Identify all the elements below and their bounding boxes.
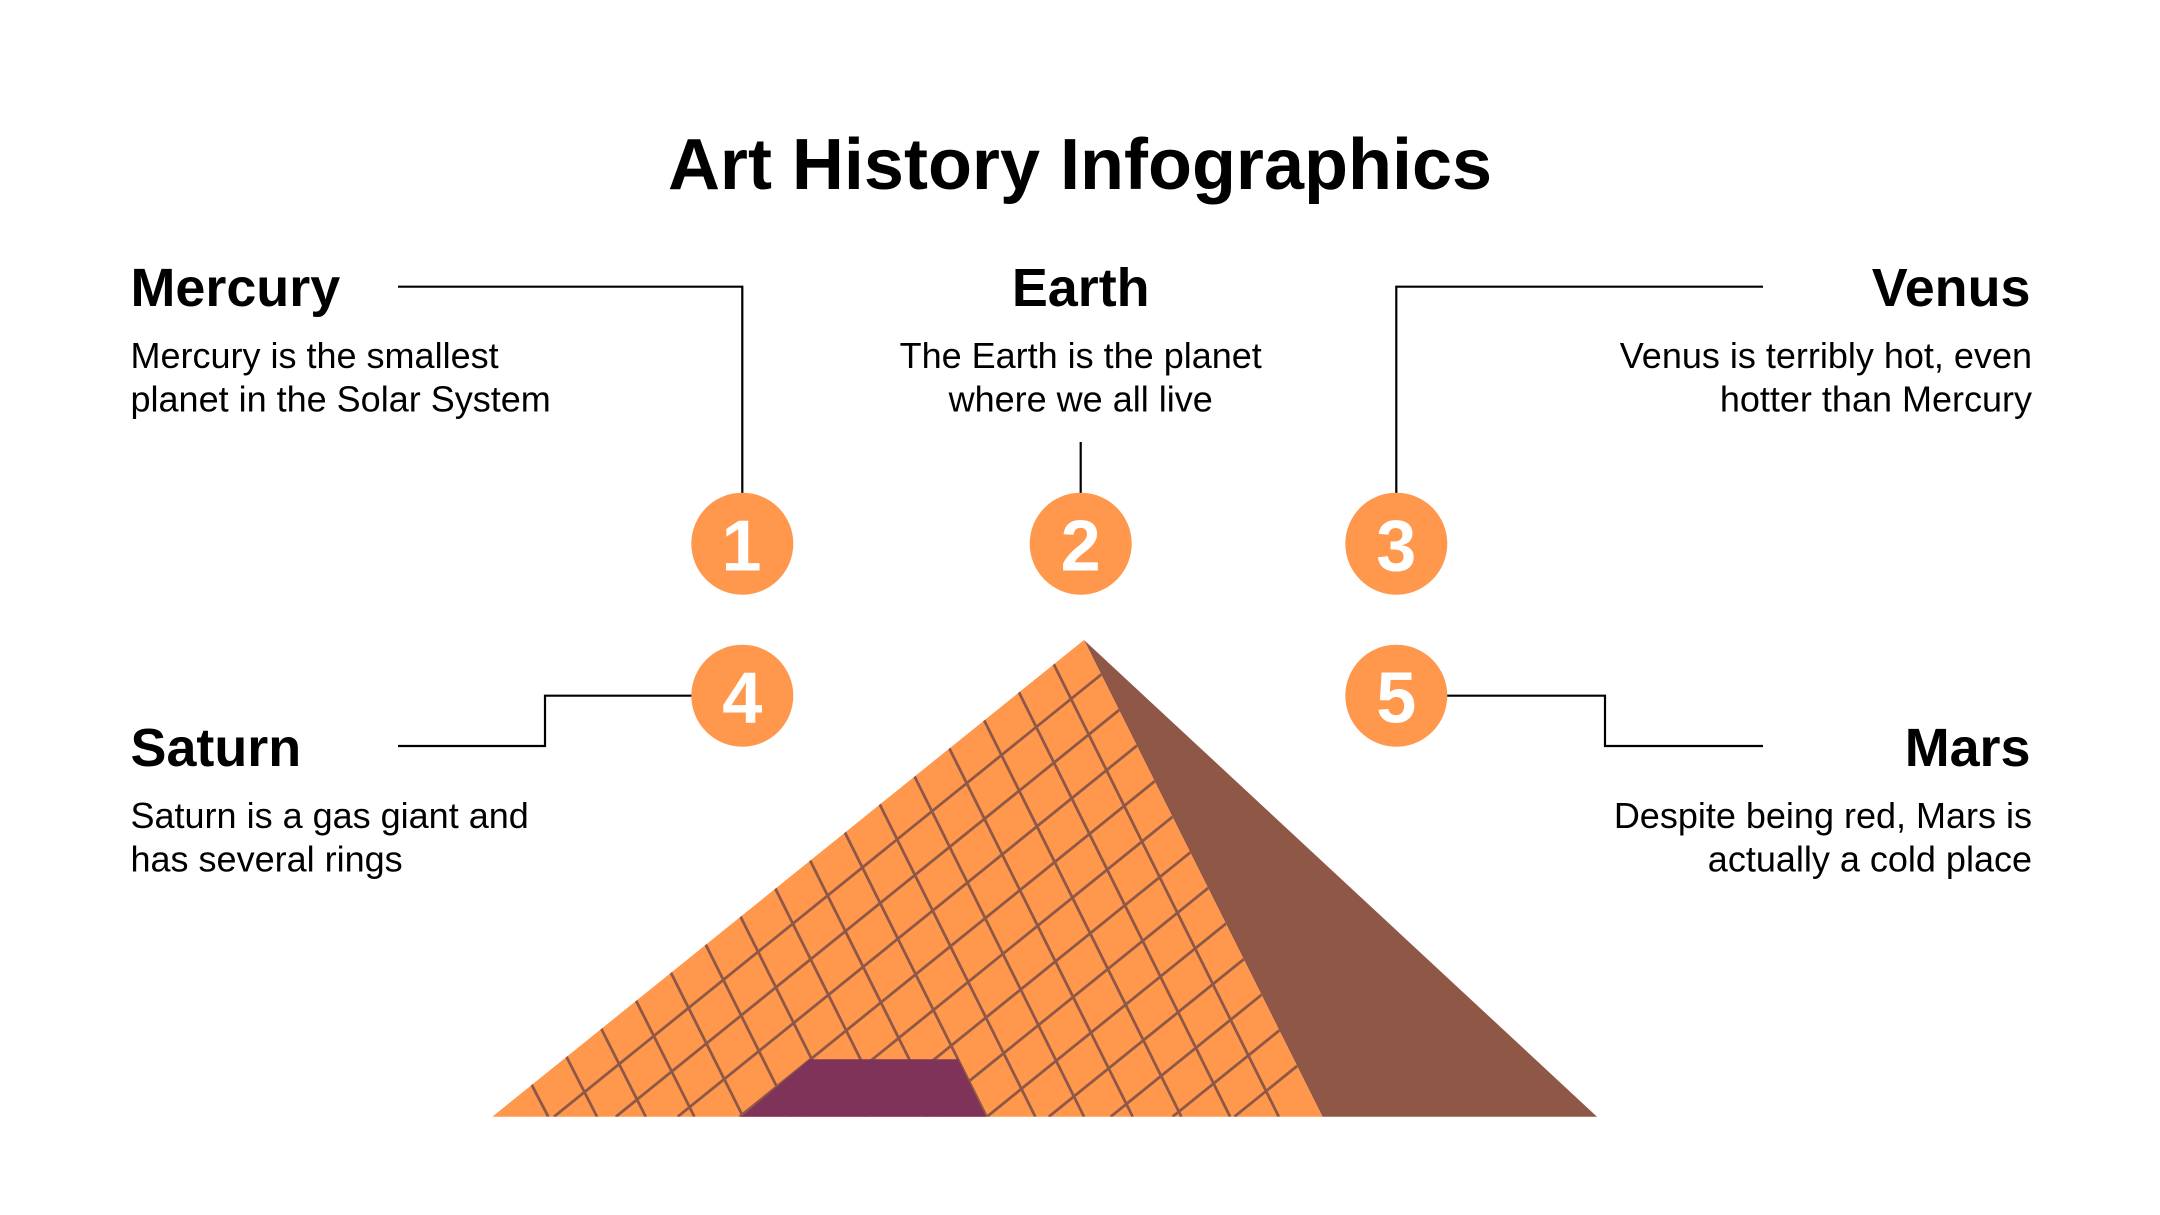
block: Mars: Despite being red, Mars is	[1614, 795, 2032, 836]
marker 2: 2	[1061, 506, 1101, 586]
block: Mercury	[130, 258, 551, 420]
marker 3: 3	[1376, 506, 1416, 586]
block: Mars: Mars	[1905, 718, 2030, 778]
marker 4	[691, 645, 793, 747]
block: Mercury: Mercury	[130, 258, 340, 318]
block: Venus: Venus	[1872, 258, 2030, 318]
marker 1	[691, 493, 793, 595]
block: Mars	[1614, 718, 2032, 880]
block: Venus	[1620, 258, 2032, 420]
doorway	[741, 1059, 986, 1117]
block: Venus: hotter than Mercury	[1720, 378, 2032, 420]
connector: Saturn to 4	[398, 696, 695, 746]
block: Earth: where we all live	[948, 378, 1213, 420]
block: Saturn: Saturn is a gas giant and	[130, 795, 529, 836]
marker 4: 4	[722, 659, 762, 739]
orange grid face	[492, 640, 1322, 1117]
block: Mars: actually a cold place	[1708, 838, 2032, 880]
block: Mercury: planet in the Solar System	[130, 378, 551, 420]
marker 5: 5	[1376, 659, 1416, 739]
marker 3	[1345, 493, 1447, 595]
marker 5	[1345, 645, 1447, 747]
block: Earth	[900, 258, 1262, 420]
block: Saturn: Saturn	[130, 718, 301, 778]
block: Saturn: has several rings	[130, 838, 403, 880]
block: Earth: Earth	[1012, 258, 1150, 318]
connector: Venus to 3	[1396, 287, 1763, 495]
connector: Mars to 5	[1447, 696, 1763, 746]
connector: Mercury to 1	[398, 287, 742, 495]
marker 2	[1030, 493, 1132, 595]
title: Art History Infographics	[668, 125, 1492, 205]
block: Venus: Venus is terribly hot, even	[1620, 335, 2032, 376]
block: Mercury: Mercury is the smallest	[130, 335, 499, 376]
marker 1: 1	[721, 506, 762, 586]
block: Saturn	[130, 718, 529, 880]
connector: Earth to 2	[1080, 442, 1082, 495]
shaded right face	[1084, 640, 1597, 1117]
block: Earth: The Earth is the planet	[900, 335, 1262, 376]
pyramid	[492, 640, 1597, 1117]
glazing grid	[531, 663, 1297, 1117]
